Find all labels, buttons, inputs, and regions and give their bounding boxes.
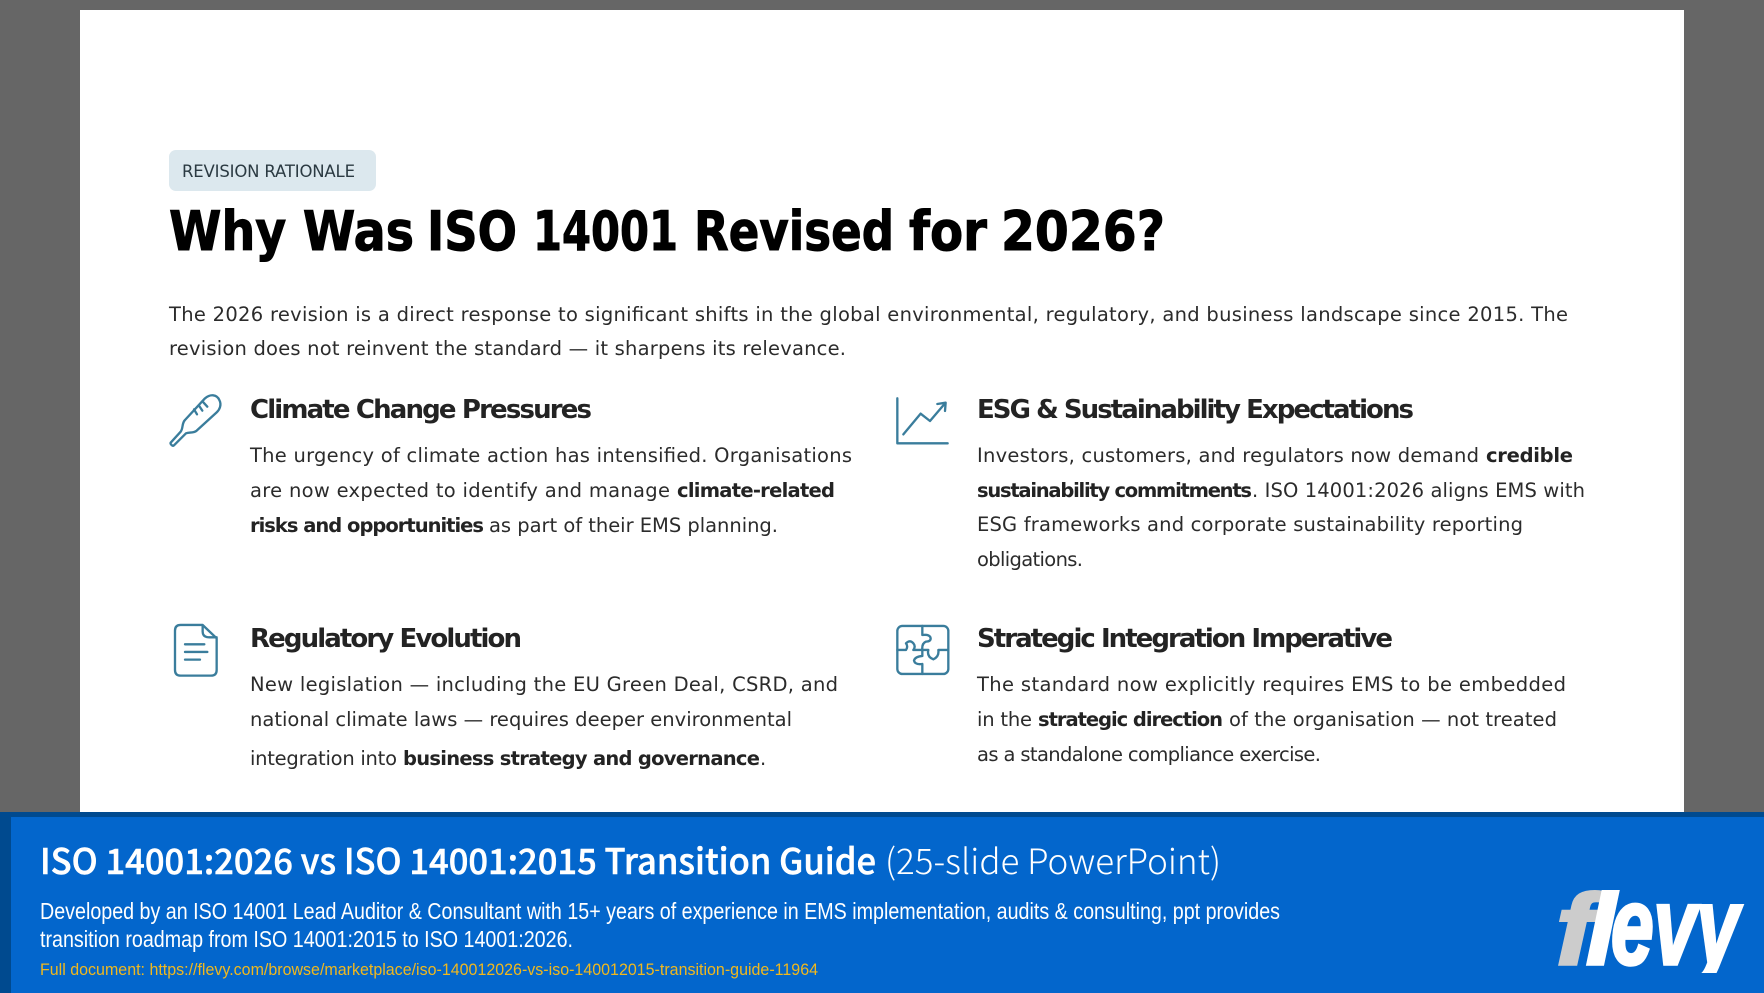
icon: puzzle xyxy=(897,626,948,674)
heading: climate change pressures: Climate Change Pressures xyxy=(250,395,592,425)
title xyxy=(169,200,1165,263)
white slide card xyxy=(80,10,1684,812)
logo: flevy: f xyxy=(1556,874,1604,986)
body text: strategic: of the organisation — not treated xyxy=(1229,708,1557,731)
title: 2026? xyxy=(1001,200,1165,263)
title: Revised xyxy=(694,200,894,263)
footer description: transition roadmap from ISO 14001:2015 to ISO 14001:2026. xyxy=(40,926,573,952)
title: ISO xyxy=(427,200,517,263)
heading: strategic integration: Strategic Integration Imperative xyxy=(977,624,1393,654)
body text: strategic: The standard now explicitly requires EMS to be embedded xyxy=(976,673,1566,696)
body text: ESG: obligations. xyxy=(977,548,1083,571)
footer description: Developed by an ISO 14001 Lead Auditor & Consultant with 15+ years of experience in EMS implementation, audits & consulting, ppt provides xyxy=(40,898,1280,924)
tag: revision rationale: REVISION RATIONALE xyxy=(182,162,355,181)
logo: flevy: l xyxy=(1586,874,1618,986)
body text: regulatory: . xyxy=(760,747,766,770)
body text: climate: risks and opportunities xyxy=(250,514,484,537)
logo: flevy xyxy=(1558,890,1744,973)
panel: ESG and sustainability expectations xyxy=(897,395,1585,571)
body text: strategic xyxy=(976,673,1566,766)
body text: regulatory: New legislation — including the EU Green Deal, CSRD, and xyxy=(250,673,838,696)
body text: climate: The urgency of climate action has intensified. Organisations xyxy=(249,444,852,467)
body text: regulatory: business strategy and governance xyxy=(403,747,760,770)
body text: strategic: strategic direction xyxy=(1038,708,1223,731)
footer title: ISO 14001:2026 vs ISO 14001:2015 Transition Guide xyxy=(40,834,876,885)
title: Why Was xyxy=(169,200,414,263)
footer title: (25-slide PowerPoint) xyxy=(885,834,1221,885)
heading: ESG: ESG & Sustainability Expectations xyxy=(977,395,1414,425)
body text: regulatory: national climate laws — requires deeper environmental xyxy=(250,708,792,731)
body text: strategic: as a standalone compliance exercise. xyxy=(977,743,1321,766)
heading: regulatory evolution: Regulatory Evolution xyxy=(250,624,522,654)
body text: ESG: . ISO 14001:2026 aligns EMS with xyxy=(1252,479,1585,502)
title: 14001 xyxy=(533,200,678,263)
intro paragraph: The 2026 revision is a direct response to significant shifts in the global environmental, regulatory, and business landscape since 2015. The xyxy=(168,303,1568,326)
panel: regulatory evolution xyxy=(175,624,838,770)
title: for xyxy=(909,200,987,263)
body text: climate: are now expected to identify and manage xyxy=(250,479,670,502)
footer link: Full document: https://flevy.com/browse/marketplace/iso-140012026-vs-iso-140012015-transition-guide-11964 xyxy=(40,961,818,979)
body text: ESG: sustainability commitments xyxy=(977,479,1252,502)
tag: revision rationale xyxy=(169,150,376,191)
panel: strategic integration imperative xyxy=(897,624,1566,766)
body text: regulatory xyxy=(250,673,838,770)
icon: document xyxy=(175,625,217,676)
body text: ESG: ESG frameworks and corporate sustainability reporting xyxy=(977,513,1523,536)
body text: climate: climate-related xyxy=(677,479,835,502)
icon: line chart xyxy=(897,398,948,443)
intro paragraph xyxy=(168,303,1568,360)
panel: climate change pressures xyxy=(171,395,852,537)
body text: ESG xyxy=(977,444,1585,571)
body text: regulatory: integration into xyxy=(250,747,397,770)
intro paragraph: revision does not reinvent the standard — it sharpens its relevance. xyxy=(169,337,846,360)
body text: ESG: credible xyxy=(1486,444,1573,467)
icon: thermometer xyxy=(171,395,220,446)
body text: strategic: in the xyxy=(977,708,1032,731)
body text: climate xyxy=(249,444,852,537)
footer band xyxy=(0,812,1764,993)
footer description xyxy=(40,898,1280,952)
body text: climate: as part of their EMS planning. xyxy=(489,514,778,537)
body text: ESG: Investors, customers, and regulators now demand xyxy=(977,444,1479,467)
